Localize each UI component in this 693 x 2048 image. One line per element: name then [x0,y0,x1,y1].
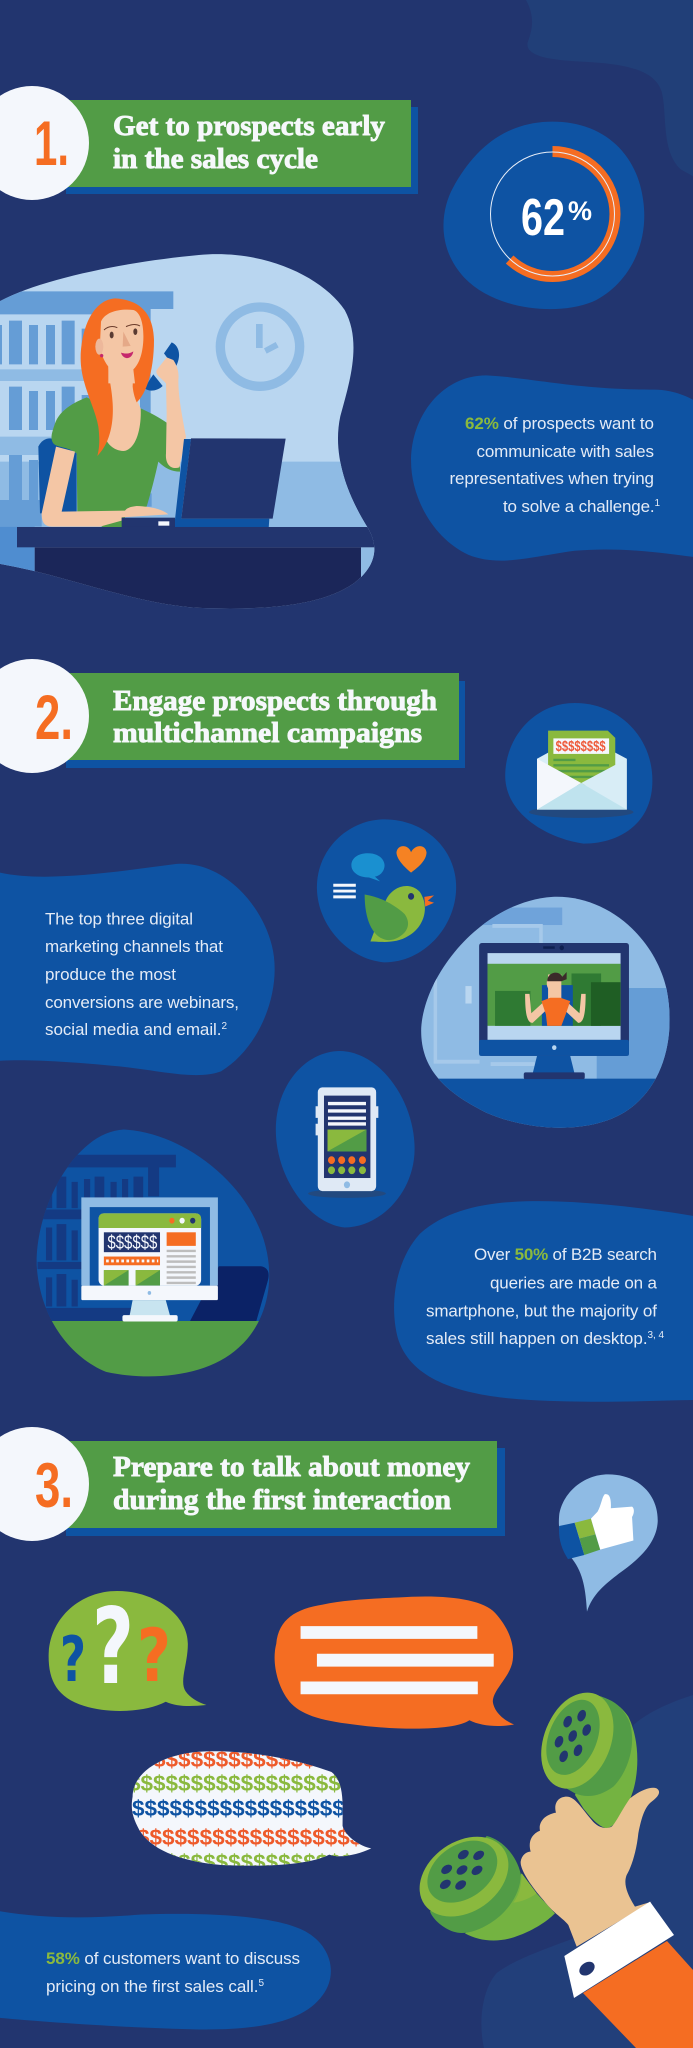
text blob: 62% of prospects: to solve a challenge. [503,497,655,516]
speech bubble: dollar pattern [132,1751,372,1866]
heading banner 3 [0,1427,505,1541]
phone mouthpiece [404,1820,555,1940]
speech bubble: dollar pattern: $$$$$$$$$$$$$$$$$$$$$$$ [128,1850,416,1875]
text blob: top three channels: produce the most [45,965,176,984]
speech bubble: question marks: ? [92,1586,134,1708]
donut chart 62% [443,122,644,309]
text blob: 58% of customers: 5 [258,1978,264,1989]
heading banner 3: Prepare to talk about money [113,1452,470,1483]
text blob: 62% of prospects: 1 [654,498,660,509]
speech bubble: dollar pattern: $$$$$$$$$$$$$$$$$$$$$$$ [128,1771,416,1796]
heading banner 3: during the first interaction [113,1485,451,1516]
speech bubble: dollar pattern: $$$$$$$$$$$$$$$$$$$$$$$ [137,1825,425,1850]
icon: desktop computer webpage [36,1130,270,1376]
section 2 [0,659,693,1402]
icon: thumbs up bubble [559,1474,658,1612]
icon: social media bird [317,819,456,962]
section 1 [0,0,693,630]
speech bubble: orange with text lines [275,1596,514,1729]
text blob: 62% of prospects: representatives when trying [450,469,654,488]
text blob: 58% of customers: 58% of customers want to discuss [46,1949,300,1968]
text blob: 58% of customers: pricing on the first sales call. [46,1977,258,1996]
heading banner 1 [0,86,418,200]
text blob: top three channels: marketing channels that [45,937,223,956]
text blob: 50% of B2B search [394,1201,693,1402]
icon: email envelope [505,703,652,844]
speech bubble: dollar pattern: $$$$$$$$$$$$$$$$$$$$$$$ [128,1747,416,1772]
illustration: woman on phone at desk [0,254,374,608]
cufflink hole [577,1959,597,1978]
text blob: 62% of prospects: 62% of prospects want to [465,414,654,433]
text blob: top three channels: The top three digital [45,910,193,928]
donut chart 62%: 62 [521,189,565,247]
heading banner 1: Get to prospects early [113,111,385,142]
text blob: top three channels: conversions are webinars, [45,993,239,1012]
chair [38,438,77,513]
text blob: 50% of B2B search: sales still happen on desktop. [426,1329,648,1348]
heading banner 1: in the sales cycle [113,144,318,175]
section 3 [0,1427,693,2048]
text blob: top three channels [0,864,275,1075]
shirt cuff [564,1902,674,1998]
icon: smartphone [276,1051,415,1227]
raised arm [156,357,186,468]
hand [521,1788,659,1947]
text blob: 50% of B2B search: 3, 4 [647,1330,664,1341]
phone handset [145,342,179,391]
heading banner 2: 2. [35,683,73,753]
text blob: 50% of B2B search: smartphone, but the majority of [426,1302,657,1321]
heading banner 3: 3. [35,1451,73,1521]
text blob: 62% of prospects [411,375,693,561]
speech bubble: question marks: ? [137,1614,171,1699]
resting arm [42,447,168,527]
text blob: 50% of B2B search: queries are made on a [490,1274,658,1292]
heading banner 2: Engage prospects through [113,686,437,717]
desk [17,527,377,547]
text blob: top three channels: 2 [221,1021,227,1032]
green top [52,397,180,527]
heading banner 2: multichannel campaigns [113,718,422,749]
heading banner 2 [0,659,465,773]
clock [216,302,304,391]
text blob: 50% of B2B search: Over 50% of B2B search [474,1245,657,1264]
webpage dollar heading: $$$$$$ [107,1233,158,1254]
illustration: hand holding green phone [404,1682,693,2048]
sleeve [583,1941,693,2048]
donut chart 62%: % [568,196,592,226]
text blob: top three channels: social media and email. [45,1020,222,1039]
speech bubble: question marks: ? [60,1623,86,1696]
laptop [174,439,269,528]
text blob: 62% of prospects: communicate with sales [476,442,654,461]
icon: webinar on monitor [420,892,672,1134]
lower-right backdrop blob [481,1695,693,2048]
face [100,310,143,383]
speech bubble: dollar pattern: $$$$$$$$$$$$$$$$$$$$$$$ [132,1796,420,1821]
bookshelf [0,291,173,527]
envelope dollar label: $$$$$$$$ [556,738,606,755]
decorative corner blob [526,0,693,176]
hair [81,298,154,456]
phone earpiece [528,1682,637,1828]
chest [107,383,141,451]
text blob: 58% of customers [0,1911,331,2030]
heading banner 1: 1. [34,109,69,179]
floor and wall lower band [0,369,407,580]
speech bubble: question marks [49,1586,206,1711]
